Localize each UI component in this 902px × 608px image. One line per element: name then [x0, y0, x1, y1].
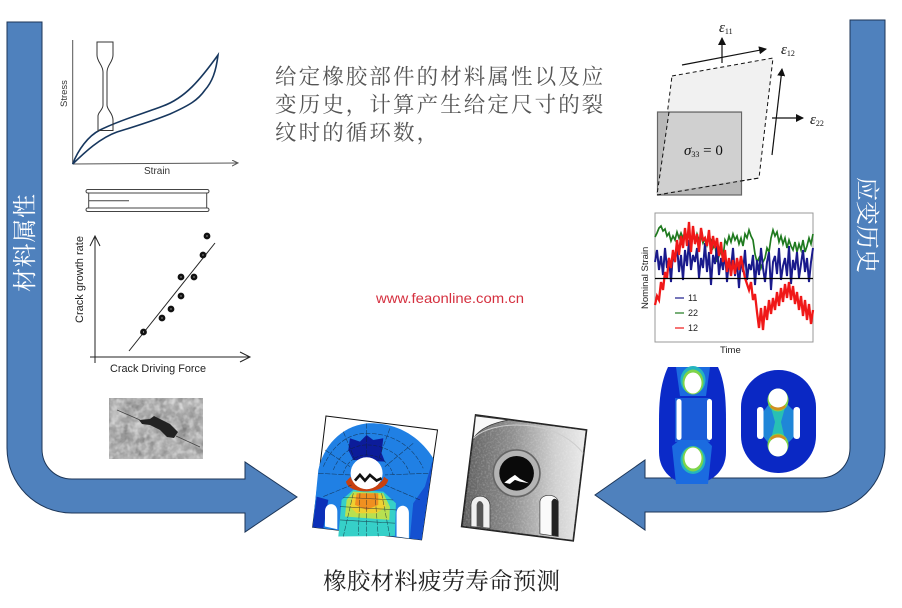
hole: [493, 450, 540, 497]
strain state diagram: 22: [816, 119, 824, 128]
epsilon labels: ε: [719, 20, 725, 36]
x label: Time: [720, 345, 741, 356]
hole and crack: [351, 457, 383, 489]
legend: 22: [688, 308, 698, 318]
series 22: [655, 226, 813, 268]
legend: 12: [688, 323, 698, 333]
y label: Crack growth rate: [74, 236, 86, 323]
hysteresis loop: [73, 55, 218, 164]
FEA result: elongated bushing: [659, 366, 726, 484]
watermark url: www.feaonline.com.cn: [375, 290, 524, 306]
series 11: [655, 240, 813, 290]
rubber part photo: [460, 414, 588, 542]
sigma label: 33: [691, 150, 699, 159]
FEA crack simulation image: [313, 416, 438, 540]
y label: Nominal Strain: [640, 247, 651, 309]
stress-strain chart: [59, 40, 238, 177]
FEA result: compressed bushing: [741, 370, 816, 473]
stress label: Stress: [59, 80, 70, 107]
axes: [94, 236, 96, 363]
right arrow label: 应变历史: [853, 177, 880, 273]
problem statement text: 纹时的循环数，: [275, 121, 440, 146]
strain state diagram: [657, 20, 824, 195]
fit line: [129, 243, 215, 351]
crack growth chart: [74, 234, 250, 375]
axes: [73, 40, 238, 164]
x label: Crack Driving Force: [110, 363, 206, 375]
left arrow label: 材料属性: [12, 194, 39, 292]
strain label: Strain: [144, 166, 170, 177]
chart frame: [655, 213, 813, 342]
strain state diagram: 12: [787, 49, 795, 58]
legend: 11: [688, 293, 697, 303]
crack photo: [109, 398, 203, 459]
slots: [325, 504, 409, 538]
nominal strain time series chart: [640, 213, 813, 356]
sigma label: = 0: [699, 143, 723, 159]
reference square: [658, 112, 742, 195]
strain state diagram: ε: [810, 112, 816, 128]
problem statement text: [275, 65, 605, 146]
legend: [675, 293, 698, 333]
slots: [471, 496, 490, 528]
series 12: [655, 222, 813, 330]
epsilon labels: 11: [725, 27, 733, 36]
strain state diagram: ε: [781, 42, 787, 58]
bottom title: 橡胶材料疲劳寿命预测: [323, 568, 560, 595]
deformed element: [657, 58, 773, 195]
disc specimen: [86, 190, 209, 212]
zero line: [655, 278, 813, 280]
crack: [504, 475, 529, 484]
sigma label: σ: [684, 143, 691, 159]
problem statement text: 变历史，计算产生给定尺寸的裂: [275, 93, 605, 118]
strain arrows: [682, 38, 803, 155]
right arrow: strain history: [595, 20, 885, 530]
data points: [142, 234, 209, 334]
mesh lines: [318, 423, 428, 537]
left arrow: material properties: [7, 22, 297, 532]
dog-bone specimen: [97, 42, 113, 130]
problem statement text: 给定橡胶部件的材料属性以及应: [275, 65, 605, 89]
